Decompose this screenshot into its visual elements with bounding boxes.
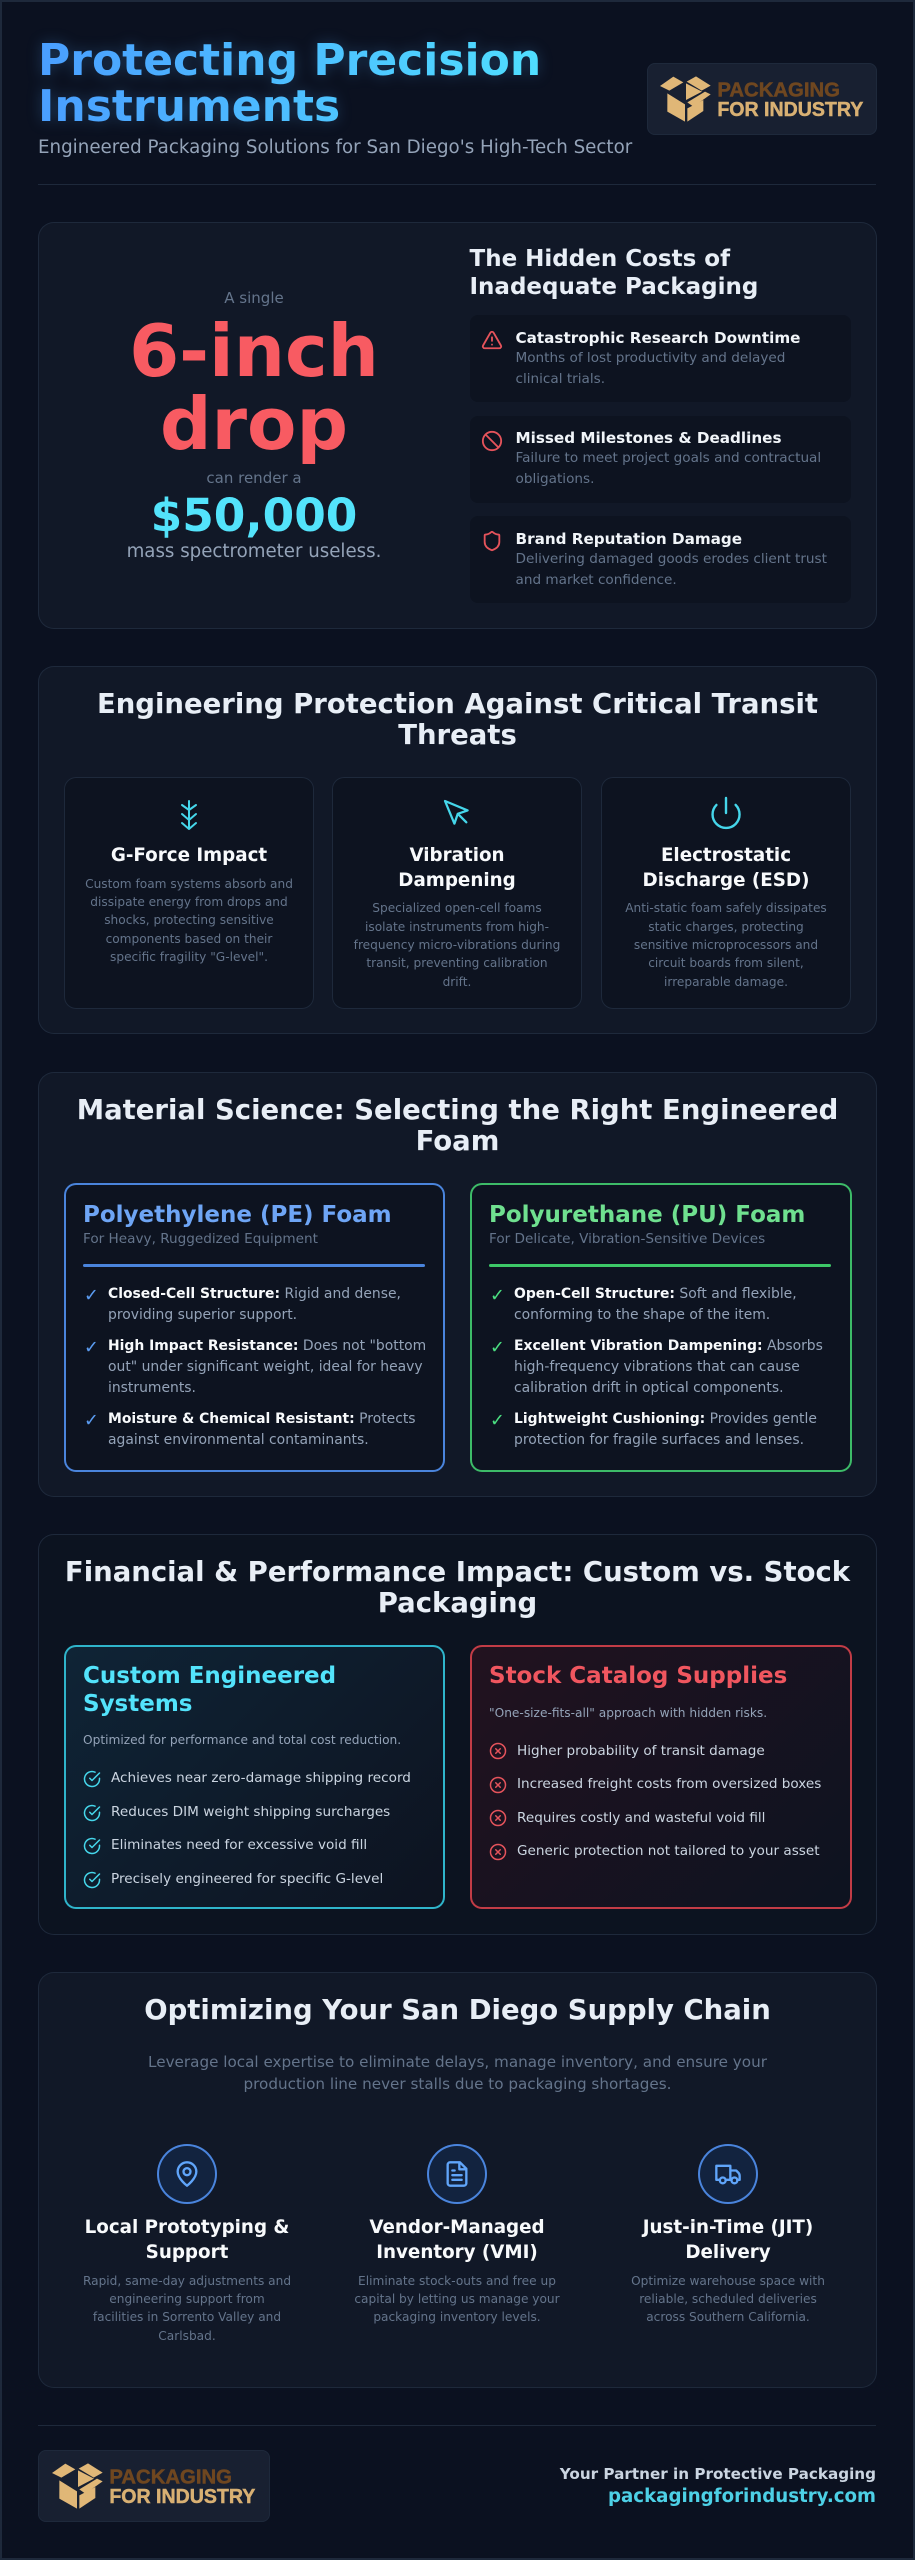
card title: G-Force Impact — [111, 845, 267, 866]
panel: custom vs stock — [38, 1534, 877, 1935]
icon: x circle — [490, 1810, 506, 1826]
card title: Discharge (ESD) — [643, 870, 809, 891]
service description: Rapid, same-day adjustments and — [83, 2274, 291, 2288]
service title: Local Prototyping & — [85, 2217, 289, 2238]
box subheading: Optimized for performance and total cost reduction. — [83, 1733, 401, 1747]
risk: Requires costly and wasteful void fill — [517, 1810, 765, 1826]
service title: Delivery — [685, 2242, 771, 2263]
card title: Vibration — [409, 845, 505, 866]
header subtitle: Engineered Packaging Solutions for San Diego's High-Tech Sector — [38, 137, 632, 158]
header title: Instruments — [38, 81, 340, 132]
service title: Inventory (VMI) — [376, 2242, 538, 2263]
icon: ban — [482, 430, 502, 452]
icon: g-force arrows — [181, 800, 197, 830]
footer website: packagingforindustry.com — [608, 2486, 876, 2507]
section heading — [97, 688, 818, 751]
feature: open-cell — [514, 1286, 797, 1323]
panel: material science — [38, 1072, 877, 1497]
card description: specific fragility "G-level". — [110, 950, 268, 964]
service description — [354, 2274, 560, 2324]
feature: impact resistance: High Impact Resistance: Does not "bottom — [108, 1338, 426, 1354]
feature: closed-cell: providing superior support. — [108, 1307, 297, 1323]
service description: facilities in Sorrento Valley and — [93, 2310, 281, 2324]
icon: x circle — [490, 1844, 506, 1860]
panel: hero statistic and hidden costs — [38, 222, 877, 629]
card: electrostatic discharge — [601, 777, 851, 1009]
icon: truck — [698, 2144, 758, 2204]
section heading: Engineering Protection Against Critical Transit — [97, 688, 818, 720]
card description: isolate instruments from high- — [365, 920, 549, 934]
card: g-force impact — [64, 777, 314, 1009]
feature: impact resistance: out" under significant weight, ideal for heavy — [108, 1359, 423, 1375]
item description — [516, 350, 785, 387]
card title — [643, 845, 809, 891]
section intro — [148, 2053, 767, 2092]
foam heading: Polyurethane (PU) Foam — [489, 1202, 805, 1228]
item title: Catastrophic Research Downtime — [516, 329, 800, 347]
section heading: Financial & Performance Impact: Custom vs. Stock — [65, 1556, 850, 1588]
card description: circuit boards from silent, — [648, 956, 804, 970]
feature: lightweight cushioning: protection for fragile surfaces and lenses. — [514, 1432, 804, 1448]
section heading: Packaging — [378, 1587, 537, 1619]
box heading: Systems — [83, 1691, 192, 1717]
card title: Electrostatic — [661, 845, 791, 866]
feature: closed-cell — [108, 1286, 401, 1323]
item description — [516, 450, 821, 487]
service description: reliable, scheduled deliveries — [639, 2292, 817, 2306]
box: stock catalog supplies — [470, 1645, 852, 1909]
box heading: Stock Catalog Supplies — [489, 1663, 787, 1689]
header logo: PACKAGING — [717, 79, 840, 102]
box: polyethylene foam — [64, 1183, 445, 1472]
card description — [85, 877, 293, 964]
section heading — [77, 1094, 838, 1157]
cost item: missed milestones — [470, 416, 851, 503]
box: custom engineered systems — [64, 1645, 445, 1909]
check bullet: ✓ — [84, 1338, 99, 1358]
panel: transit threats — [38, 666, 877, 1034]
section heading — [65, 1556, 850, 1619]
header title — [38, 38, 578, 130]
footer tagline: Your Partner in Protective Packaging — [560, 2465, 876, 2483]
item description: Delivering damaged goods erodes client trust — [516, 551, 827, 567]
icon: shield — [484, 530, 500, 552]
card title — [398, 845, 516, 891]
cost item: brand damage — [470, 516, 851, 603]
check bullet: ✓ — [490, 1338, 505, 1358]
card description: sensitive microprocessors and — [634, 938, 818, 952]
card description: drift. — [443, 975, 471, 989]
box heading: Custom Engineered — [83, 1663, 336, 1689]
feature: vibration dampening: high-frequency vibrations that can cause — [514, 1359, 800, 1375]
footer logo: FOR INDUSTRY — [109, 2485, 256, 2508]
card description: Custom foam systems absorb and — [85, 877, 293, 891]
check bullet: ✓ — [490, 1286, 505, 1306]
card description: frequency micro-vibrations during — [354, 938, 560, 952]
card description: irreparable damage. — [664, 975, 788, 989]
box heading — [83, 1663, 336, 1717]
service description: capital by letting us manage your — [354, 2292, 560, 2306]
service description: engineering support from — [109, 2292, 265, 2306]
section heading: Foam — [416, 1125, 499, 1157]
text: can render a: can render a — [206, 469, 302, 487]
feature: moisture resistant: against environmental contaminants. — [108, 1432, 369, 1448]
icon: x circle — [490, 1742, 506, 1760]
big stat: 6-inch drop: 6-inch — [129, 309, 379, 393]
risk: Higher probability of transit damage — [517, 1743, 765, 1759]
feature: moisture resistant: Moisture & Chemical Resistant: Protects — [108, 1411, 416, 1427]
cost item: research downtime — [470, 315, 851, 402]
box: polyurethane foam — [470, 1183, 852, 1472]
service description: Carlsbad. — [158, 2329, 216, 2343]
feature: vibration dampening — [514, 1338, 823, 1396]
big stat: $50,000: $50,000 — [151, 489, 357, 542]
section intro: Leverage local expertise to eliminate delays, manage inventory, and ensure your — [148, 2053, 767, 2071]
footer logo — [38, 2450, 270, 2522]
card description: Specialized open-cell foams — [372, 901, 542, 915]
item description — [516, 551, 827, 588]
service title: Just-in-Time (JIT) — [643, 2217, 813, 2238]
service title: Support — [146, 2242, 228, 2263]
foam subheading: For Heavy, Ruggedized Equipment — [83, 1231, 318, 1247]
card: vibration dampening — [332, 777, 582, 1009]
feature: closed-cell: Closed-Cell Structure: Rigid and dense, — [108, 1286, 401, 1302]
item title: Brand Reputation Damage — [516, 530, 742, 548]
feature: moisture resistant — [108, 1411, 416, 1448]
service description — [608, 2272, 848, 2327]
service description — [83, 2274, 291, 2343]
card description: components based on their — [106, 932, 272, 946]
header logo — [647, 63, 877, 135]
service description: Eliminate stock-outs and free up — [358, 2274, 556, 2288]
service title — [369, 2217, 545, 2263]
feature: vibration dampening: calibration drift in optical components. — [514, 1380, 784, 1396]
icon: check circle — [84, 1838, 100, 1854]
item title: Missed Milestones & Deadlines — [516, 429, 781, 447]
card description — [354, 901, 560, 989]
card title: Dampening — [398, 870, 516, 891]
panel: supply chain — [38, 1972, 877, 2388]
section heading: Threats — [398, 719, 517, 751]
card description — [625, 901, 827, 989]
service title — [642, 2217, 813, 2263]
card description: dissipate energy from drops and — [90, 895, 288, 909]
item description: clinical trials. — [516, 371, 605, 387]
icon: check circle — [84, 1872, 100, 1888]
feature: lightweight cushioning: Lightweight Cushioning: Provides gentle — [514, 1411, 817, 1427]
service title: Vendor-Managed — [369, 2217, 545, 2238]
heading: hidden costs: Inadequate Packaging — [470, 274, 758, 300]
icon: warning triangle — [482, 330, 502, 350]
section heading: Material Science: Selecting the Right Engineered — [77, 1094, 838, 1126]
foam subheading: For Delicate, Vibration-Sensitive Devices — [489, 1231, 765, 1247]
check bullet: ✓ — [84, 1411, 99, 1431]
box subheading: "One-size-fits-all" approach with hidden risks. — [489, 1706, 767, 1720]
service description: packaging inventory levels. — [373, 2310, 541, 2324]
card description: shocks, protecting sensitive — [104, 913, 274, 927]
icon: check circle — [84, 1770, 100, 1788]
foam heading: Polyethylene (PE) Foam — [83, 1202, 392, 1228]
heading: hidden costs: The Hidden Costs of — [470, 246, 730, 272]
card description: transit, preventing calibration — [366, 956, 548, 970]
check bullet: ✓ — [490, 1411, 505, 1431]
accent rule — [489, 1264, 831, 1267]
section heading: Optimizing Your San Diego Supply Chain — [144, 1994, 771, 2026]
icon: power — [711, 796, 741, 830]
icon: location pin — [157, 2144, 217, 2204]
benefit: Achieves near zero-damage shipping record — [111, 1770, 411, 1786]
service title — [85, 2217, 289, 2263]
feature: open-cell: conforming to the shape of the item. — [514, 1307, 770, 1323]
item description: Failure to meet project goals and contractual — [516, 450, 821, 466]
header title: Protecting Precision — [38, 35, 541, 86]
icon: x circle — [490, 1776, 506, 1794]
feature: vibration dampening: Excellent Vibration Dampening: Absorbs — [514, 1338, 823, 1354]
feature: open-cell: Open-Cell Structure: Soft and flexible, — [514, 1286, 797, 1302]
icon: check circle — [84, 1804, 100, 1822]
feature: lightweight cushioning — [514, 1411, 817, 1448]
text: a single: A single — [224, 289, 284, 307]
feature: impact resistance — [108, 1338, 426, 1396]
section intro: production line never stalls due to packaging shortages. — [243, 2074, 672, 2092]
benefit: Reduces DIM weight shipping surcharges — [111, 1804, 390, 1820]
heading: hidden costs — [470, 246, 758, 300]
risk: Generic protection not tailored to your asset — [517, 1843, 820, 1859]
header logo: FOR INDUSTRY — [717, 98, 864, 121]
big stat: 6-inch drop: drop — [160, 382, 348, 466]
risk: Increased freight costs from oversized boxes — [517, 1776, 821, 1792]
benefit: Precisely engineered for specific G-level — [111, 1871, 383, 1887]
item description: Months of lost productivity and delayed — [516, 350, 785, 366]
feature: impact resistance: instruments. — [108, 1380, 196, 1396]
text: mass spectrometer useless: mass spectrometer useless. — [127, 541, 381, 562]
item description: and market confidence. — [516, 572, 677, 588]
footer logo: PACKAGING — [109, 2466, 232, 2489]
icon: document — [427, 2144, 487, 2204]
icon: cursor pointer — [444, 800, 469, 825]
benefit: Eliminates need for excessive void fill — [111, 1837, 367, 1853]
card description: static charges, protecting — [648, 920, 804, 934]
service description: across Southern California. — [646, 2310, 810, 2324]
card description: Anti-static foam safely dissipates — [625, 901, 827, 915]
accent rule — [83, 1264, 425, 1267]
service description: Optimize warehouse space with — [631, 2274, 825, 2288]
item description: obligations. — [516, 471, 594, 487]
big stat: 6-inch drop — [129, 309, 379, 466]
check bullet: ✓ — [84, 1286, 99, 1306]
